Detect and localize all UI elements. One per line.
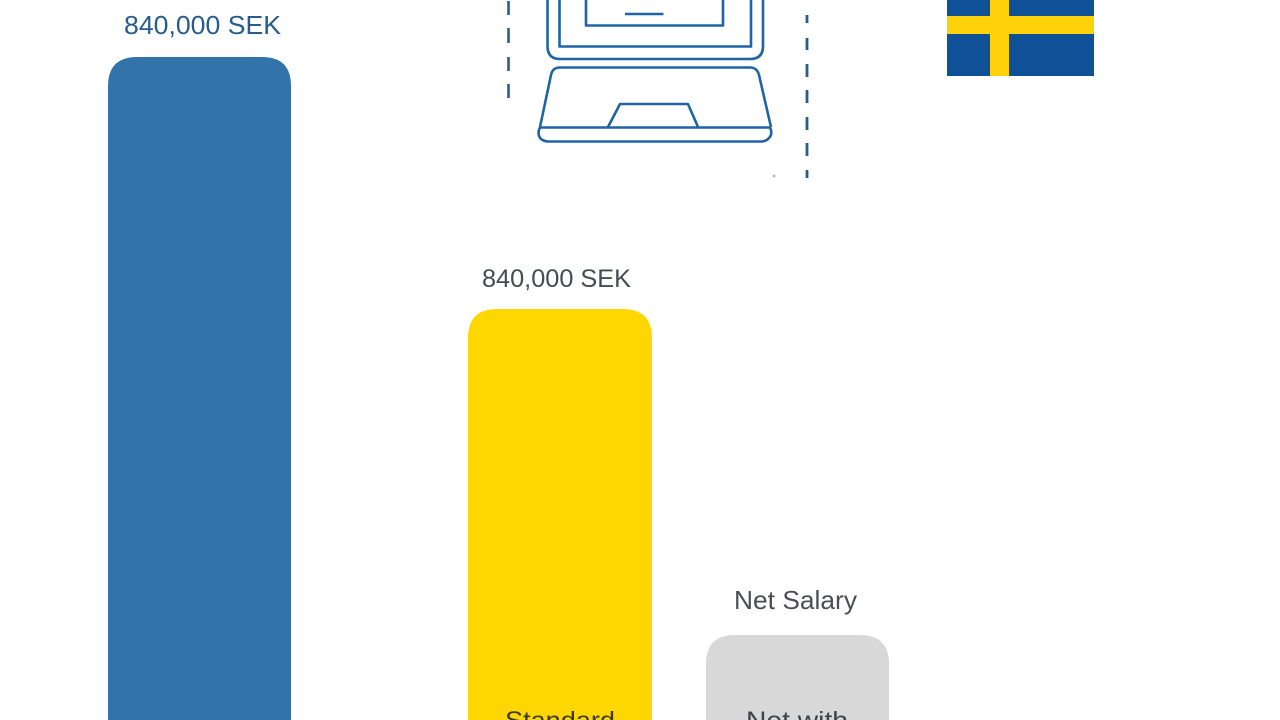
- small dot: [773, 175, 775, 177]
- dashed line right: [806, 15, 808, 178]
- bar label: standard amount: 840,000 SEK: [482, 265, 631, 293]
- bar label: net salary: Net Salary: [734, 585, 857, 615]
- laptop screen: [548, 0, 763, 59]
- bar: gross salary: [108, 10, 291, 720]
- flag field: [947, 0, 1094, 76]
- flag vertical stripe: [990, 0, 1009, 76]
- bar label: gross amount: 840,000 SEK: [124, 10, 282, 40]
- bar: standard: [468, 265, 652, 720]
- icon: laptop with dashed frame: [508, 0, 807, 178]
- bar shape: grey: [706, 635, 889, 720]
- laptop base: [538, 68, 771, 142]
- bar shape: blue: [108, 57, 291, 720]
- flag horizontal stripe: [947, 16, 1094, 34]
- icon: Swedish flag: [947, 0, 1094, 76]
- bar shape: yellow: [468, 309, 652, 720]
- bar: net salary: [706, 585, 889, 720]
- dashed line left: [507, 1, 510, 98]
